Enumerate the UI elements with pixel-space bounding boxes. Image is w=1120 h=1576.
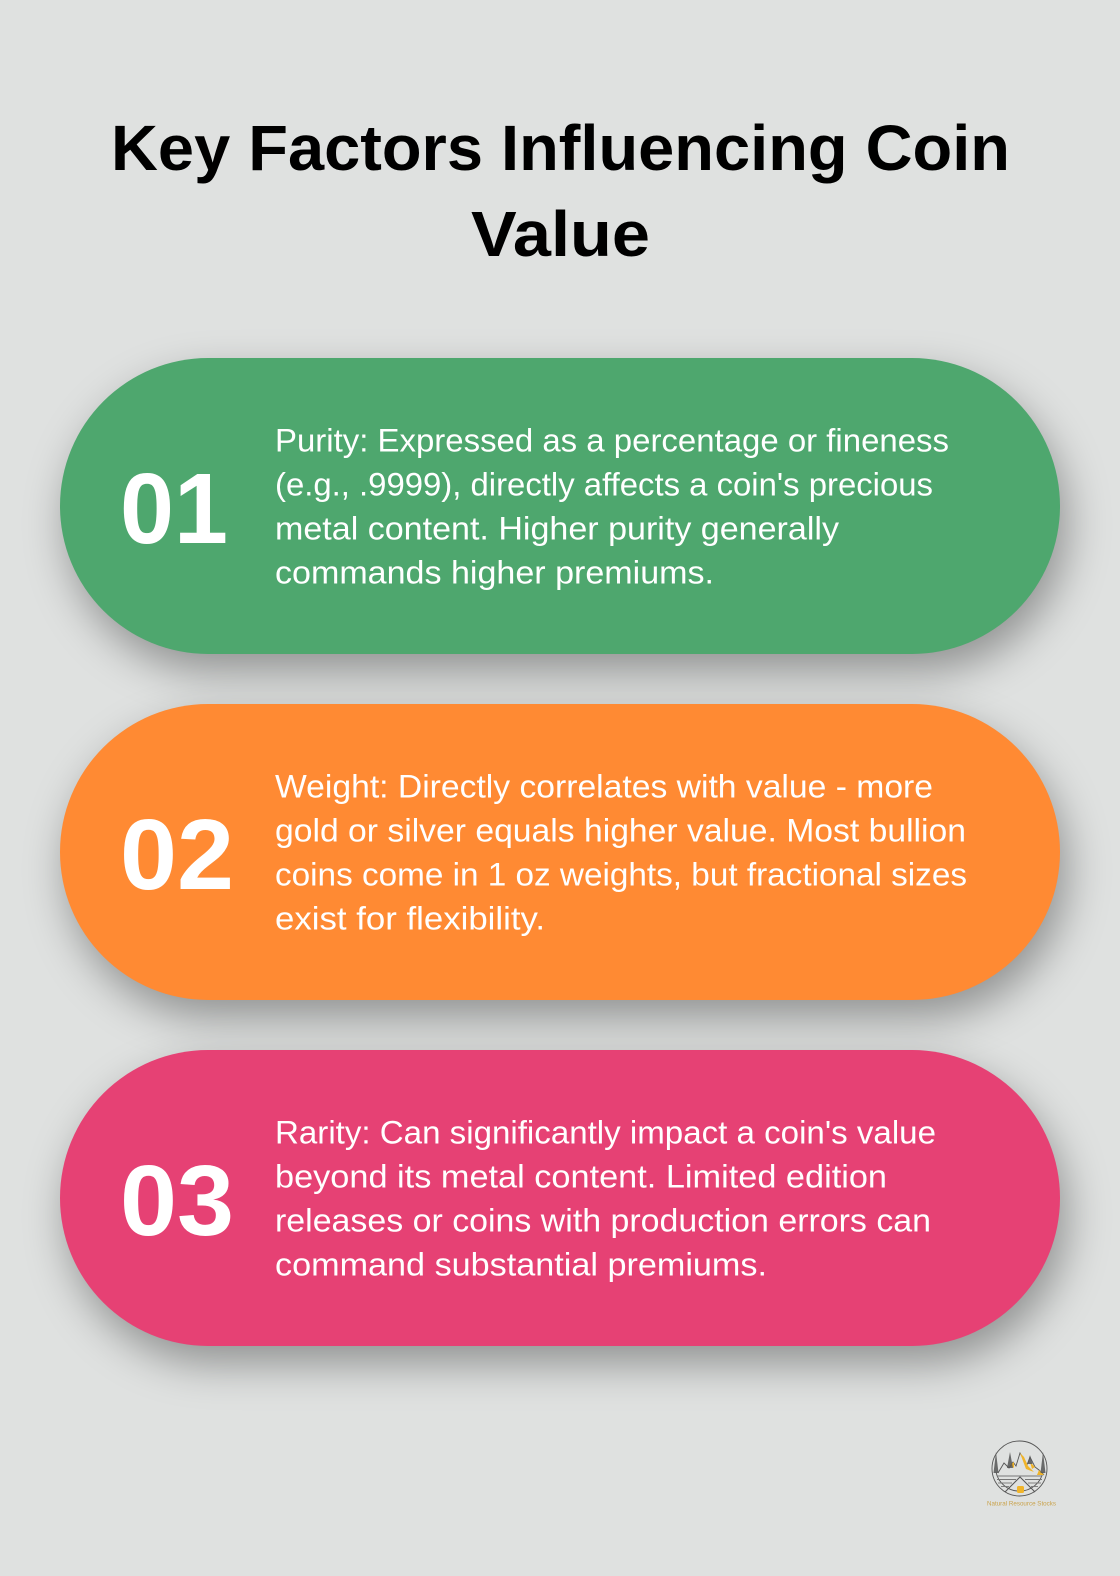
weight text: exist for flexibility. (275, 901, 545, 937)
rarity text: command substantial premiums. (275, 1247, 767, 1283)
panel: purity (60, 358, 1060, 654)
panel: rarity (60, 1050, 1060, 1346)
title: Key Factors Influencing Coin (111, 112, 1010, 184)
number 02: 02 (120, 799, 234, 911)
title (111, 112, 1010, 270)
rarity text (275, 1115, 936, 1283)
weight text: Weight: Directly correlates with value - more (275, 769, 933, 805)
weight text: coins come in 1 oz weights, but fractional sizes (275, 857, 967, 893)
purity text: metal content. Higher purity generally (275, 511, 840, 547)
purity text: commands higher premiums. (275, 555, 714, 591)
purity text: (e.g., .9999), directly affects a coin's precious (275, 467, 933, 503)
icon: cabin (1005, 1477, 1035, 1493)
number 03: 03 (120, 1145, 234, 1257)
number 01: 01 (120, 453, 228, 565)
weight text: gold or silver equals higher value. Most bullion (275, 813, 966, 849)
icon: pine trees (994, 1452, 1046, 1473)
purity text: Purity: Expressed as a percentage or fineness (275, 423, 949, 459)
icon: mountains (998, 1453, 1044, 1475)
icon: ring (992, 1441, 1047, 1496)
rarity text: Rarity: Can significantly impact a coin's value (275, 1115, 936, 1151)
icon: water lines (997, 1476, 1042, 1486)
purity text (275, 423, 949, 591)
logo: Natural Resource Stocks (987, 1440, 1057, 1508)
logo caption: Natural Resource Stocks (987, 1500, 1057, 1508)
rarity text: beyond its metal content. Limited edition (275, 1159, 887, 1195)
title: Value (471, 198, 650, 270)
weight text (275, 769, 967, 937)
panel: weight (60, 704, 1060, 1000)
rarity text: releases or coins with production errors can (275, 1203, 931, 1239)
